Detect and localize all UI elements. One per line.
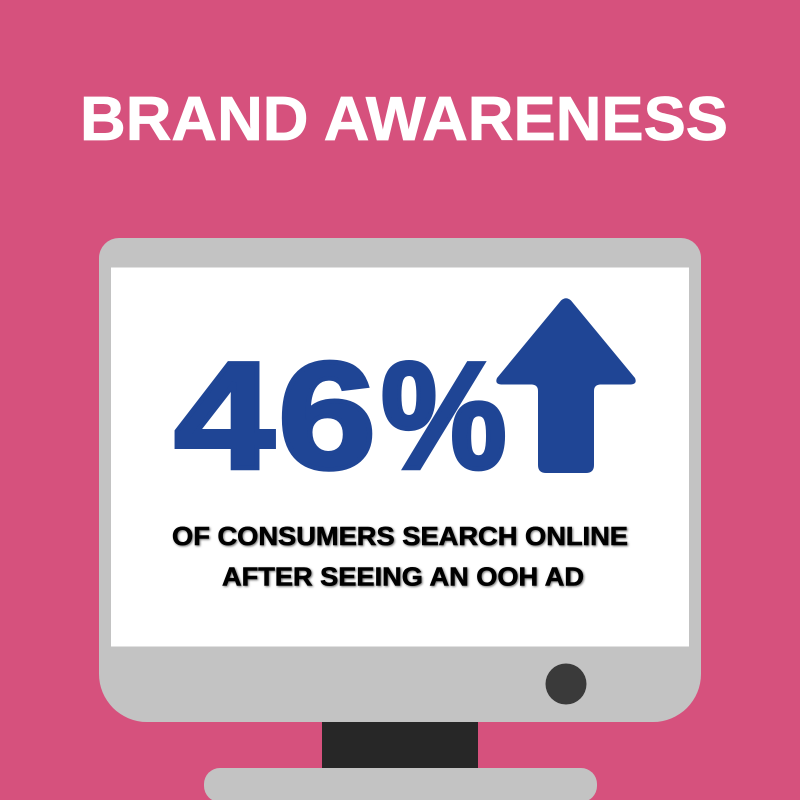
monitor stand neck <box>322 720 478 770</box>
caption line 1: OF CONSUMERS SEARCH ONLINE <box>172 521 628 551</box>
percent sign: % <box>381 331 507 501</box>
icon: up arrow <box>496 298 636 473</box>
monitor power button <box>546 664 586 704</box>
statistic: 46% <box>174 330 507 501</box>
monitor <box>99 238 701 800</box>
monitor stand base <box>204 768 597 800</box>
monitor screen <box>111 268 689 646</box>
title: BRAND AWARENESS <box>80 84 728 154</box>
caption <box>172 521 628 592</box>
caption line 2: AFTER SEEING AN OOH AD <box>222 562 584 592</box>
digit 4: 4 <box>174 332 274 501</box>
monitor body <box>99 238 701 722</box>
digit 6: 6 <box>278 330 376 500</box>
